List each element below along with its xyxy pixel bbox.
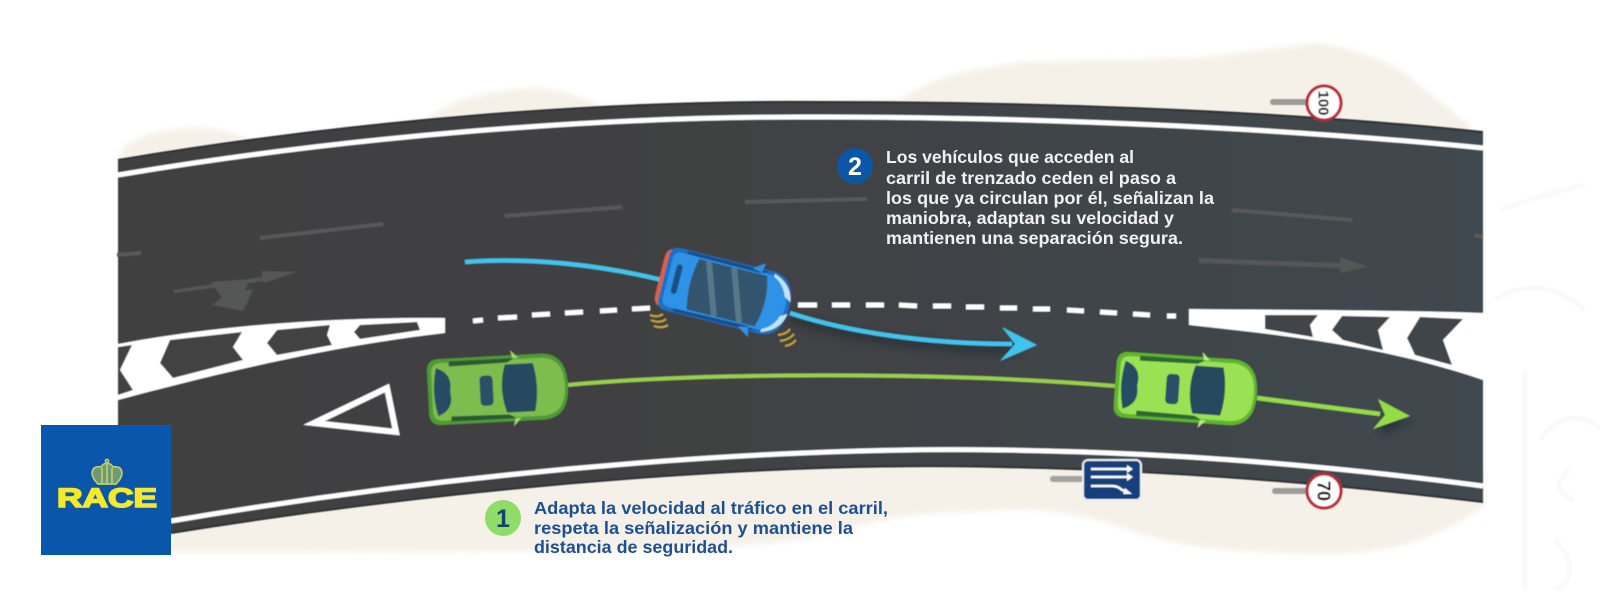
step 2 badge: 2: [848, 153, 862, 181]
road edge lines: [118, 102, 1483, 533]
lane divider dashes: [473, 305, 1176, 321]
right chevron island: [1189, 309, 1483, 380]
car: blue merging: [651, 239, 798, 345]
speed sign 100: [1270, 86, 1341, 120]
lane sign: [1050, 460, 1141, 500]
icon: crown: [92, 459, 122, 484]
speed sign 70: 70: [1314, 481, 1334, 501]
speed sign 70: [1272, 474, 1341, 508]
step 1 text: distancia de seguridad.: [534, 537, 733, 557]
road surface: [118, 102, 1483, 545]
faint lane dashes: [117, 199, 1483, 255]
green path arrow: [568, 375, 1412, 434]
step 2 text: maniobra, adaptan su velocidad y: [886, 208, 1174, 228]
yield triangle marking: [314, 388, 396, 432]
step 2 badge: [837, 148, 873, 184]
indicator signals: [650, 314, 796, 346]
car: green right: [1113, 346, 1259, 432]
step 2 text: los que ya circulan por él, señalizan la: [886, 188, 1214, 208]
watermark: faint ornament: [1495, 185, 1600, 590]
step 1 text: [534, 498, 888, 557]
RACE logo: RACE: [57, 483, 157, 513]
step 1 text: respeta la señalización y mantiene la: [534, 518, 853, 538]
speed sign 100: 100: [1314, 90, 1332, 116]
step 2 text: carril de trenzado ceden el paso a: [886, 168, 1176, 188]
car: green left: [426, 347, 570, 431]
step 2 text: mantienen una separación segura.: [886, 228, 1183, 248]
RACE logo: [41, 425, 171, 555]
left chevron island: [118, 318, 445, 400]
ground: beige terrain: [119, 43, 1484, 553]
step 2 text: [886, 147, 1214, 248]
step 2 text: Los vehículos que acceden al: [886, 147, 1134, 167]
step 1 badge: [485, 500, 521, 536]
faint road arrows: [173, 257, 1368, 311]
blue path arrow: [465, 261, 1037, 361]
step 1 badge: 1: [496, 505, 510, 533]
step 1 text: Adapta la velocidad al tráfico en el carril,: [534, 498, 888, 518]
